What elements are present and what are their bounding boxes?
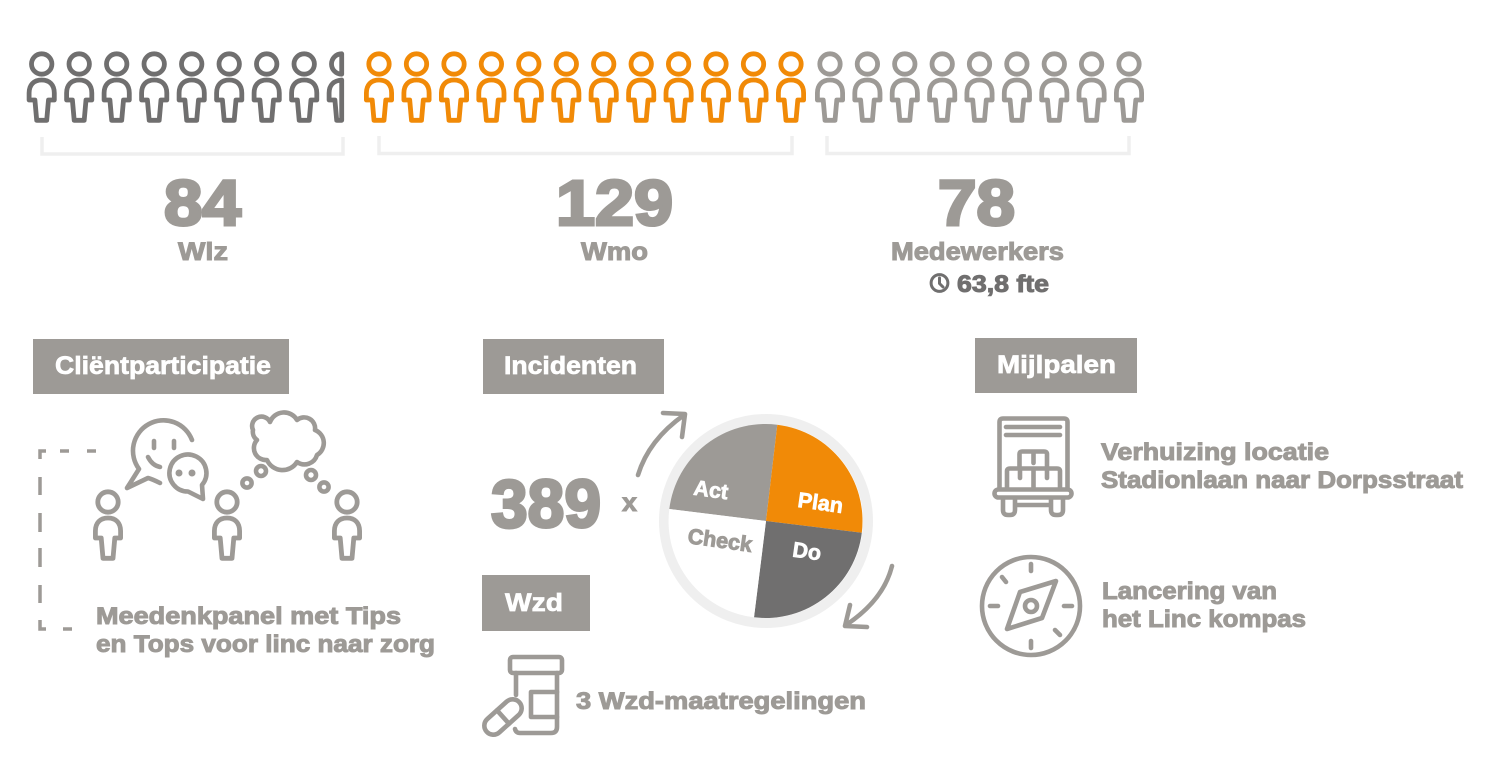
people row: Wlz (84)	[29, 54, 342, 120]
bracket: Wlz	[42, 137, 343, 154]
people row: Medewerkers (78)	[817, 54, 1142, 120]
arrow: bottom cycle	[845, 566, 892, 627]
icon: small speech bubble	[169, 455, 206, 499]
stat: 84 Wlz: 84	[164, 167, 241, 239]
text: Verhuizing: Verhuizing locatie	[1101, 439, 1329, 466]
heading: Incidenten: Incidenten	[504, 352, 637, 380]
PDCA wheel: Act	[692, 476, 730, 504]
heading: Mijlpalen: Mijlpalen	[997, 351, 1116, 379]
icon: pill bottle	[481, 657, 562, 738]
stat: 389 x: x	[622, 487, 638, 517]
text: Verhuizing: Stadionlaan naar Dorpsstraat	[1101, 467, 1463, 494]
heading: Cliëntparticipatie: Cliëntparticipatie	[55, 352, 271, 380]
stat: 389 x: 389	[491, 466, 601, 542]
heading: Incidenten	[483, 339, 664, 394]
stat: 78 Medewerkers: 78	[938, 167, 1015, 239]
text: Meedenkpanel: Meedenkpanel met Tips	[96, 603, 401, 630]
PDCA wheel	[664, 419, 868, 623]
PDCA wheel: Plan	[796, 488, 845, 518]
stat: 129 Wmo: 129	[556, 167, 673, 239]
heading: Wzd	[482, 575, 590, 631]
text: Meedenkpanel: en Tops voor linc naar zorg	[96, 631, 435, 658]
icon: moving truck	[994, 418, 1072, 515]
stat: 84 Wlz	[164, 167, 241, 266]
stat: 129 Wmo	[556, 167, 673, 266]
text: Meedenkpanel	[96, 603, 435, 658]
heading: Wzd: Wzd	[505, 589, 563, 617]
icon: three people	[95, 492, 360, 558]
dashed bracket: participation	[40, 451, 96, 629]
heading: Mijlpalen	[975, 338, 1137, 393]
icon: compass	[982, 557, 1080, 655]
stat: 129 Wmo: Wmo	[581, 238, 648, 266]
text: Wzd-maatregelingen: 3 Wzd-maatregelingen	[576, 688, 866, 715]
PDCA wheel: Do	[791, 538, 823, 565]
icon: thought cloud	[242, 412, 329, 492]
text: Lancering: Lancering van	[1102, 578, 1277, 605]
bracket: Medewerkers	[827, 136, 1129, 154]
stat: 84 Wlz: Wlz	[178, 238, 228, 266]
text: Verhuizing	[1101, 439, 1463, 494]
stat: 78 Medewerkers: Medewerkers	[891, 238, 1064, 266]
PDCA wheel: Check	[686, 524, 754, 557]
text: Lancering	[1102, 578, 1306, 633]
stat: 78 Medewerkers	[891, 167, 1064, 266]
people row: Wmo (129)	[366, 54, 804, 120]
bracket: Wmo	[379, 136, 792, 154]
fte line with clock icon: 63,8 fte	[957, 271, 1049, 298]
arrow: top cycle	[638, 413, 685, 475]
heading: Cliëntparticipatie	[33, 339, 289, 394]
text: Lancering: het Linc kompas	[1102, 606, 1306, 633]
icon: smiling speech bubble	[127, 420, 192, 488]
